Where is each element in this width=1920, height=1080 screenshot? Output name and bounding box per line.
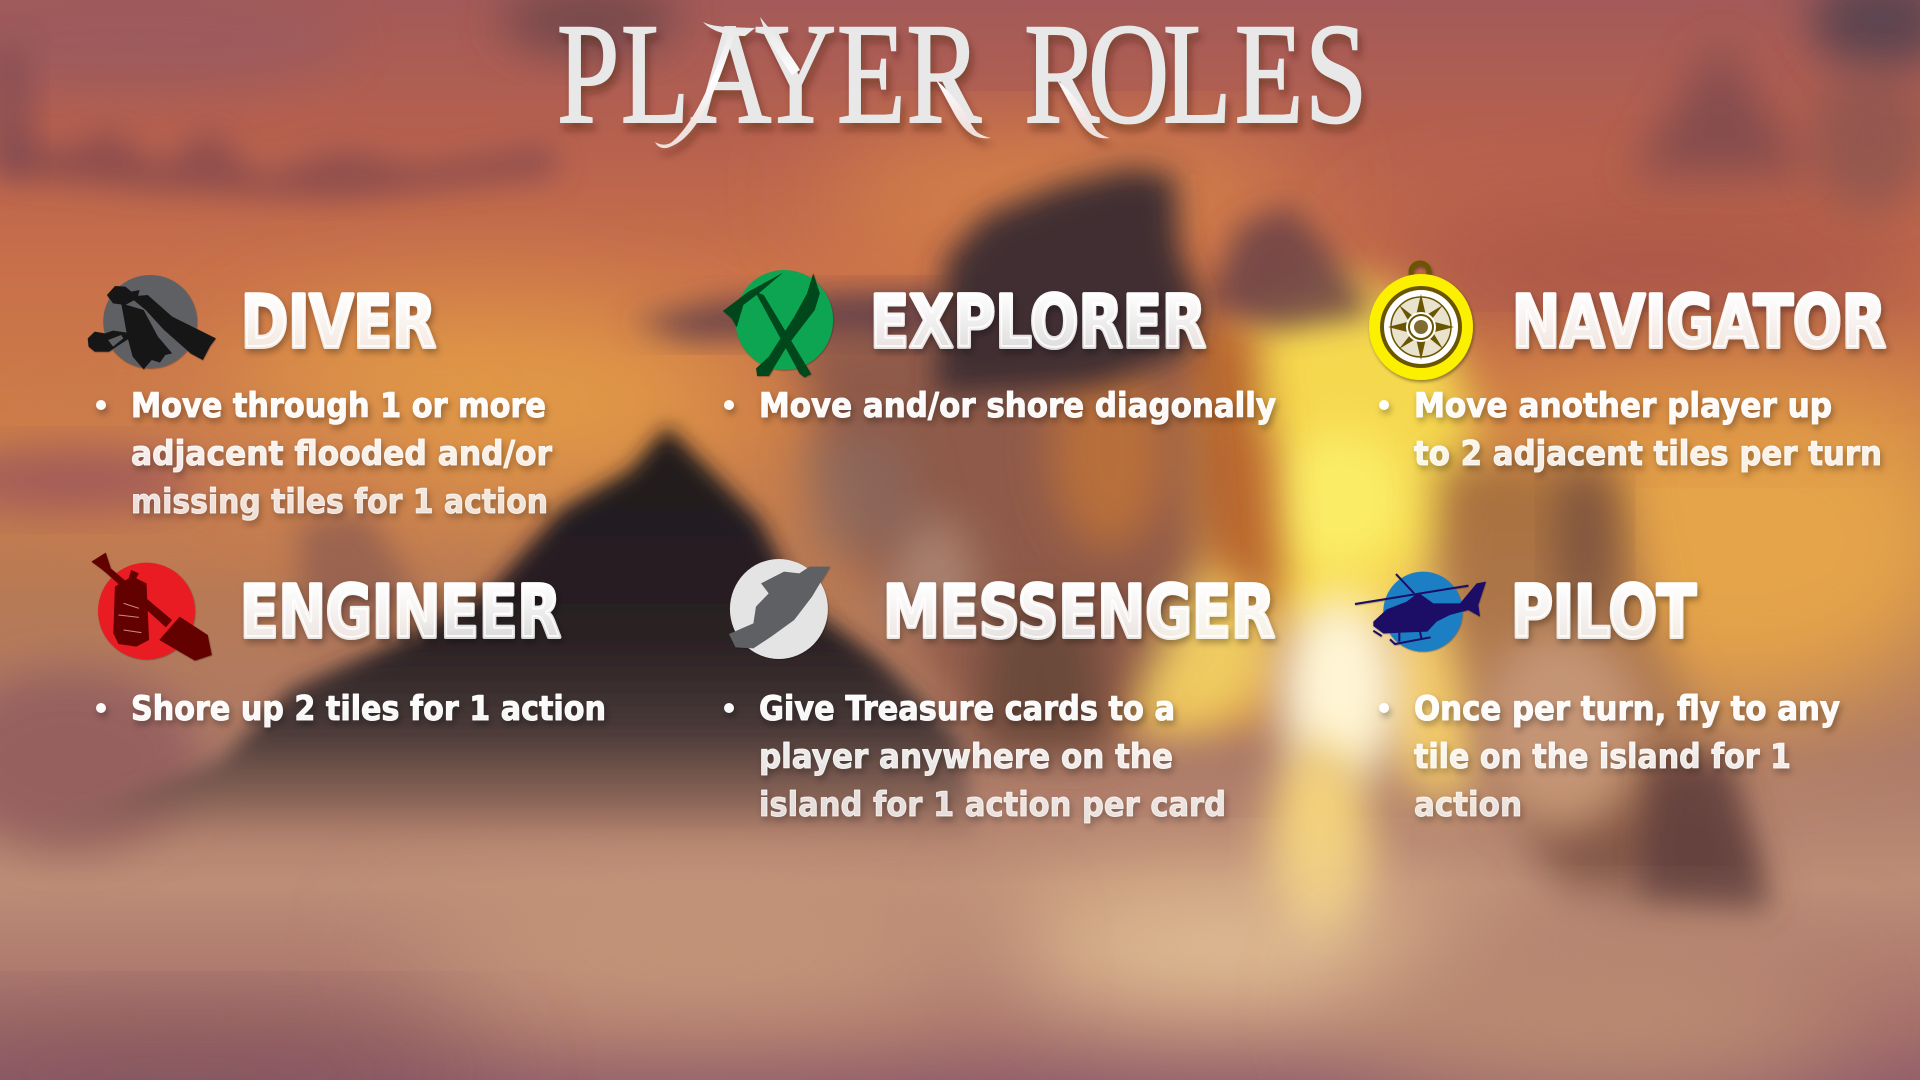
text: navigator ability: Move another player up	[1414, 386, 1832, 426]
role: diver	[88, 275, 552, 522]
text: pilot ability	[1379, 689, 1840, 825]
text: diver ability: missing tiles for 1 action	[131, 482, 548, 522]
text: pilot ability: tile on the island for 1	[1414, 737, 1791, 777]
icon: messenger winged boot	[729, 559, 830, 659]
text: diver ability	[96, 386, 552, 522]
icon: diver fins and mask	[88, 275, 216, 369]
role: messenger	[724, 559, 1275, 825]
text: pilot ability: Once per turn, fly to any	[1414, 689, 1840, 729]
role: engineer	[91, 553, 606, 729]
text: pilot ability: action	[1414, 785, 1522, 825]
role: explorer	[723, 270, 1276, 426]
text: messenger ability	[724, 689, 1226, 825]
heading: engineer: ENGINEER	[240, 570, 561, 654]
text: navigator ability: to 2 adjacent tiles per turn	[1414, 434, 1882, 474]
role: navigator	[1369, 263, 1886, 474]
heading: explorer: EXPLORER	[870, 280, 1206, 364]
text: messenger ability: player anywhere on the	[759, 737, 1173, 777]
text: diver ability: adjacent flooded and/or	[131, 434, 552, 474]
icon: explorer crossed pick and shovel	[723, 270, 833, 377]
heading: messenger: MESSENGER	[883, 570, 1275, 654]
text: engineer ability: Shore up 2 tiles for 1 action	[131, 689, 606, 729]
text: messenger ability: island for 1 action per card	[759, 785, 1226, 825]
role: pilot	[1355, 570, 1840, 825]
heading: pilot: PILOT	[1511, 570, 1696, 654]
text: messenger ability: Give Treasure cards to a	[759, 689, 1175, 729]
icon: navigator compass	[1369, 263, 1473, 380]
heading: diver: DIVER	[241, 280, 436, 364]
icon: engineer sandbag and shovel	[91, 553, 212, 661]
text: navigator ability	[1379, 386, 1882, 474]
text: diver ability: Move through 1 or more	[131, 386, 546, 426]
text: explorer ability: Move and/or shore diagonally	[759, 386, 1276, 426]
icon: pilot helicopter	[1355, 572, 1486, 652]
